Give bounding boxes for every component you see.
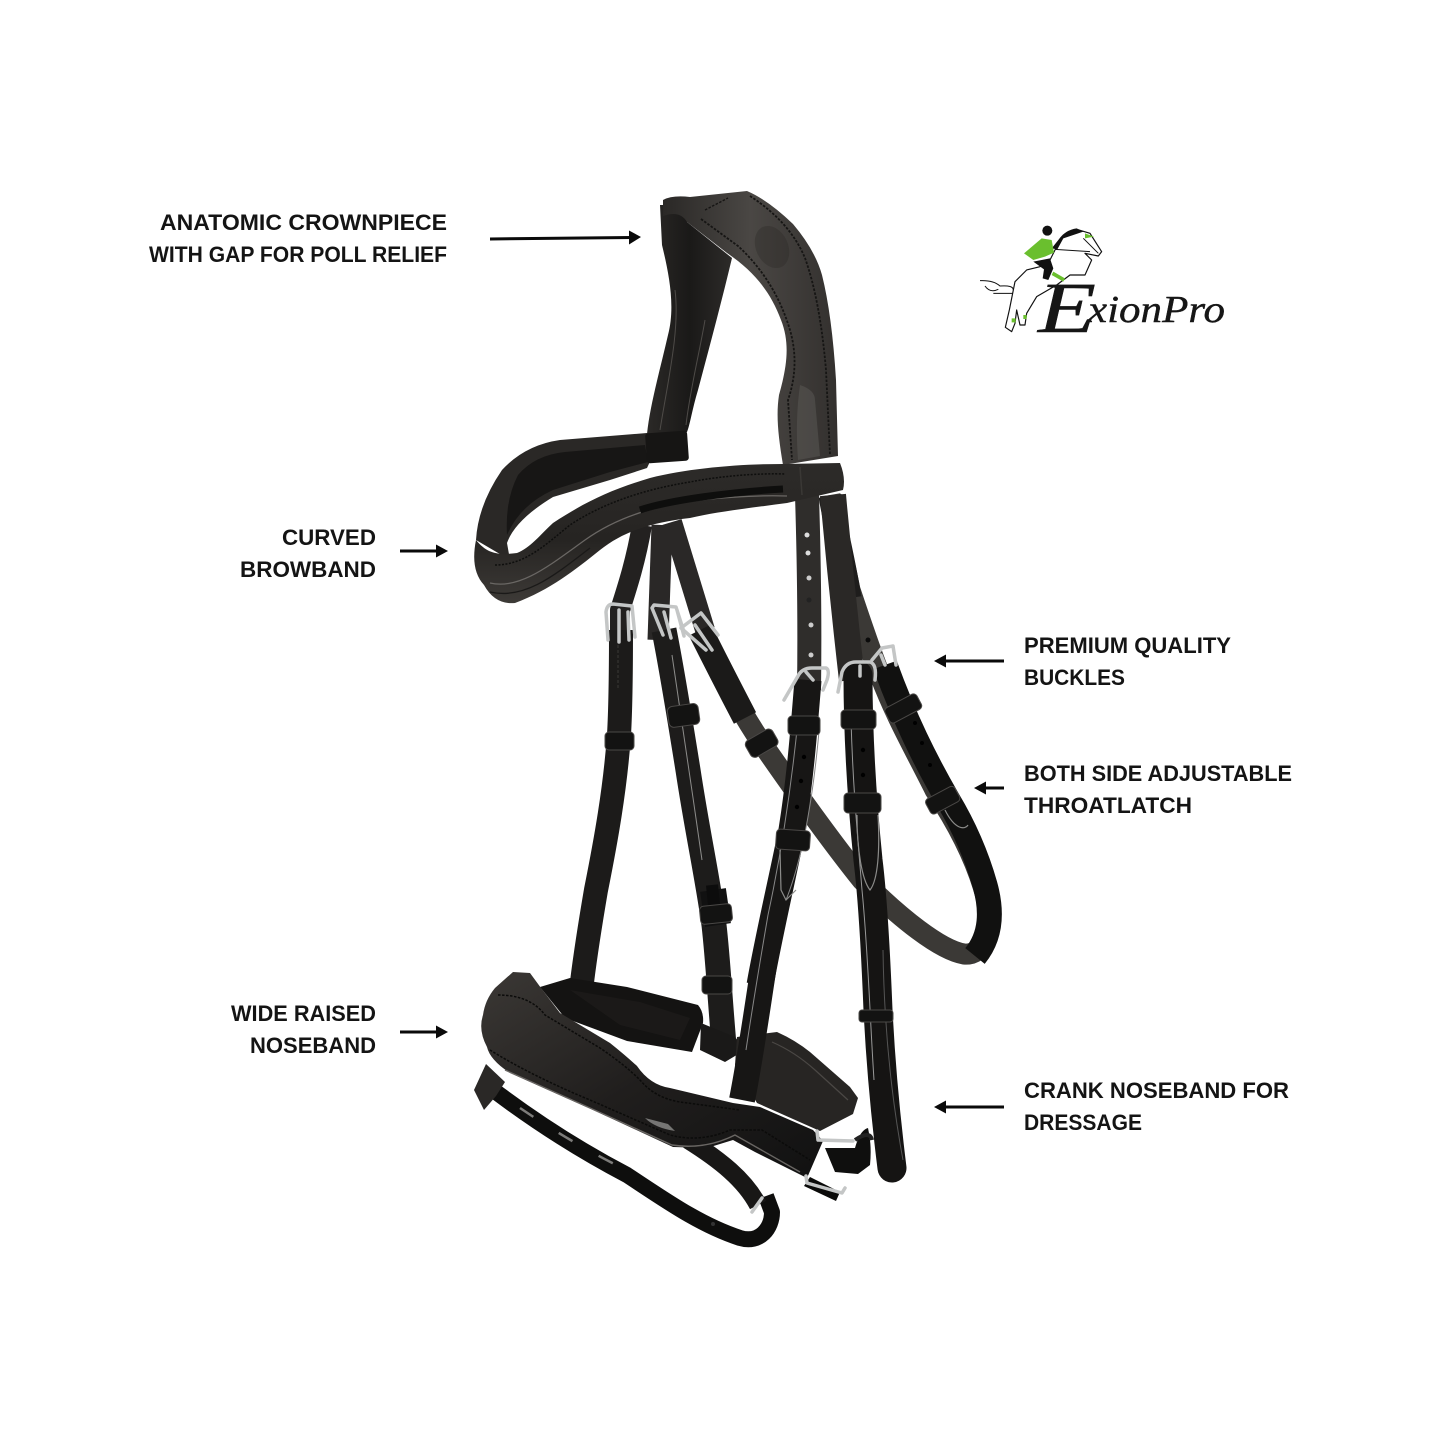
arrow: noseband — [400, 1026, 448, 1038]
lower crank strap — [474, 1064, 772, 1239]
logo: ExionPro: xionPro — [1087, 289, 1225, 331]
wordmark: E — [1037, 268, 1096, 348]
arrow: throatlatch — [974, 782, 1004, 794]
arrow: crank noseband — [934, 1100, 1004, 1114]
label: buckles: PREMIUM QUALITY — [1024, 633, 1231, 658]
left cheek strap — [582, 525, 642, 982]
crownpiece padding — [647, 205, 732, 434]
label: throatlatch — [1024, 761, 1292, 818]
label: crank noseband: DRESSAGE — [1024, 1110, 1142, 1135]
wide raised noseband — [481, 972, 840, 1201]
throatlatch strap — [700, 495, 989, 956]
curved browband — [474, 431, 844, 603]
bridle photo illustration — [474, 191, 989, 1239]
leather keepers — [605, 692, 961, 1022]
label: crownpiece: WITH GAP FOR POLL RELIEF — [149, 242, 447, 267]
label: browband — [240, 525, 376, 582]
label: buckles — [1024, 633, 1231, 690]
back pad — [540, 978, 745, 1062]
icon: horse and rider — [980, 226, 1102, 332]
right cheek strap front — [760, 495, 820, 985]
crank noseband right panel — [735, 1032, 858, 1131]
right cheek strap lower end — [742, 915, 768, 1100]
keeper tips — [780, 810, 968, 900]
label: throatlatch: BOTH SIDE ADJUSTABLE — [1024, 761, 1292, 786]
label: noseband — [231, 1001, 376, 1058]
logo: ExionPro — [980, 226, 1225, 348]
centre cheek strap — [658, 522, 724, 1045]
label: crownpiece: ANATOMIC CROWNPIECE — [160, 210, 447, 235]
label: buckles: BUCKLES — [1024, 665, 1125, 690]
label: browband: CURVED — [282, 525, 376, 550]
label: crank noseband: CRANK NOSEBAND FOR — [1024, 1078, 1289, 1103]
buckles — [606, 604, 896, 700]
label: noseband: NOSEBAND — [250, 1033, 376, 1058]
label: crank noseband — [1024, 1078, 1289, 1135]
crownpiece — [663, 191, 838, 465]
arrow: crownpiece — [490, 230, 641, 244]
label: noseband: WIDE RAISED — [231, 1001, 376, 1026]
arrow: browband — [400, 544, 448, 558]
label: browband: BROWBAND — [240, 557, 376, 582]
label: crownpiece — [149, 210, 447, 267]
arrow: buckles — [934, 654, 1004, 668]
noseband buckle fitting — [806, 1128, 872, 1193]
right cheek strap rear — [833, 495, 903, 1168]
label: throatlatch: THROATLATCH — [1024, 793, 1192, 818]
